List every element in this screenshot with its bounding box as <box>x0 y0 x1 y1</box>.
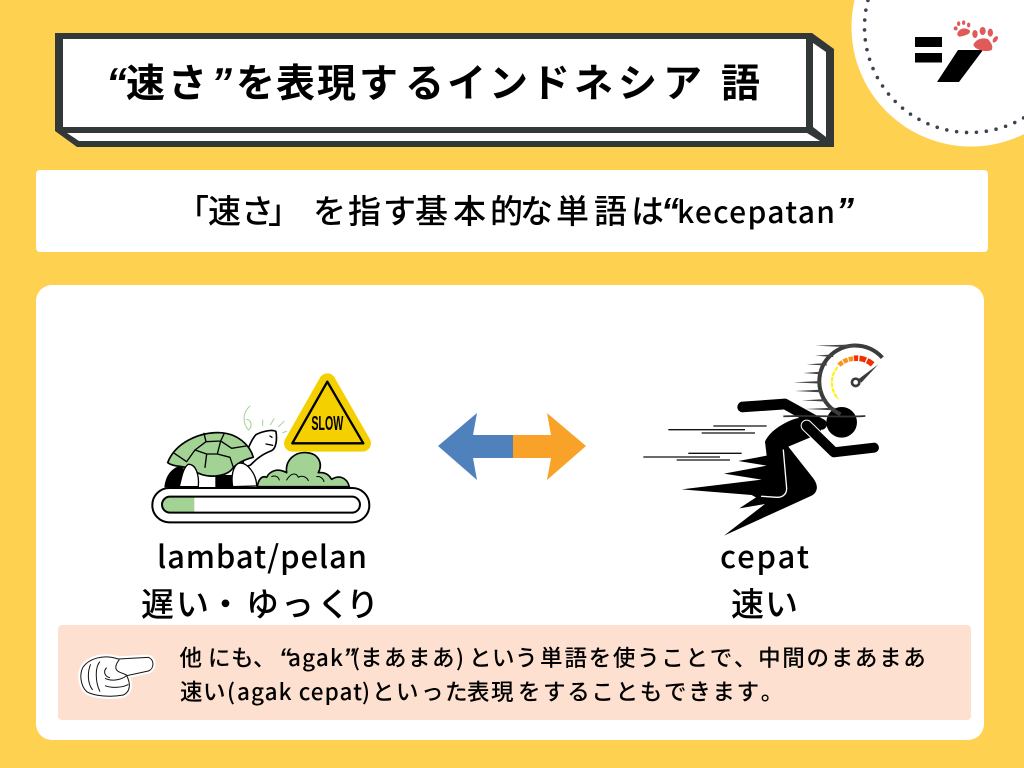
front legs <box>179 464 198 487</box>
subtitle text: kecepatan <box>677 188 835 232</box>
back arm <box>743 404 822 424</box>
note text: ) <box>456 641 464 673</box>
illustration: slow turtle <box>152 382 369 522</box>
slow sign: SLOW <box>311 413 343 435</box>
note text: 他にも、 <box>180 641 276 673</box>
slow sign <box>292 382 363 443</box>
icon: pointing hand <box>81 657 153 696</box>
speedometer <box>783 344 882 417</box>
note text: ” <box>343 644 356 672</box>
bush <box>257 453 349 487</box>
fast label japanese: 速い <box>731 578 798 626</box>
note panel: といった表現をすることもできます。 <box>372 675 783 707</box>
subtitle panel <box>36 170 988 252</box>
subtitle text: 「速さ」を指す基本的な単語は <box>176 185 664 233</box>
note panel: 速い <box>180 675 226 707</box>
note panel: ( <box>227 675 235 707</box>
fast label: cepat <box>720 532 809 577</box>
back legs <box>164 466 188 487</box>
front arm <box>807 426 874 452</box>
note text: まあまあ <box>360 641 455 673</box>
note text: “ <box>279 644 292 672</box>
title text: を表現するインドネシア語 <box>236 53 760 109</box>
title text: 速さ <box>126 53 207 109</box>
arrow: double headed <box>438 413 586 480</box>
progress bar <box>152 488 369 522</box>
note text: という単語を使うことで、中間のまあまあ <box>469 641 926 673</box>
note panel <box>58 625 971 720</box>
shell <box>168 433 253 476</box>
note text: ( <box>352 641 360 673</box>
neck and head <box>242 431 276 468</box>
speed lines <box>643 426 767 460</box>
subtitle text: “ <box>661 190 679 231</box>
note text: agak <box>288 641 343 673</box>
slow label: lambat/pelan <box>157 532 367 577</box>
note panel: ) <box>362 675 370 707</box>
title banner <box>55 33 834 147</box>
worry marks <box>244 406 287 433</box>
subtitle text: ” <box>836 190 854 231</box>
note panel: agak cepat <box>237 675 362 707</box>
illustration: running figure <box>643 344 882 536</box>
title text: “ <box>106 59 127 106</box>
logo badge <box>852 0 1024 146</box>
torso, leg and motion spikes <box>682 418 823 536</box>
main panel <box>36 285 984 740</box>
head <box>826 407 857 438</box>
slow label japanese: 遅い・ゆっくり <box>141 578 379 626</box>
icon: paw prints <box>954 20 999 51</box>
title text: ” <box>211 59 232 106</box>
